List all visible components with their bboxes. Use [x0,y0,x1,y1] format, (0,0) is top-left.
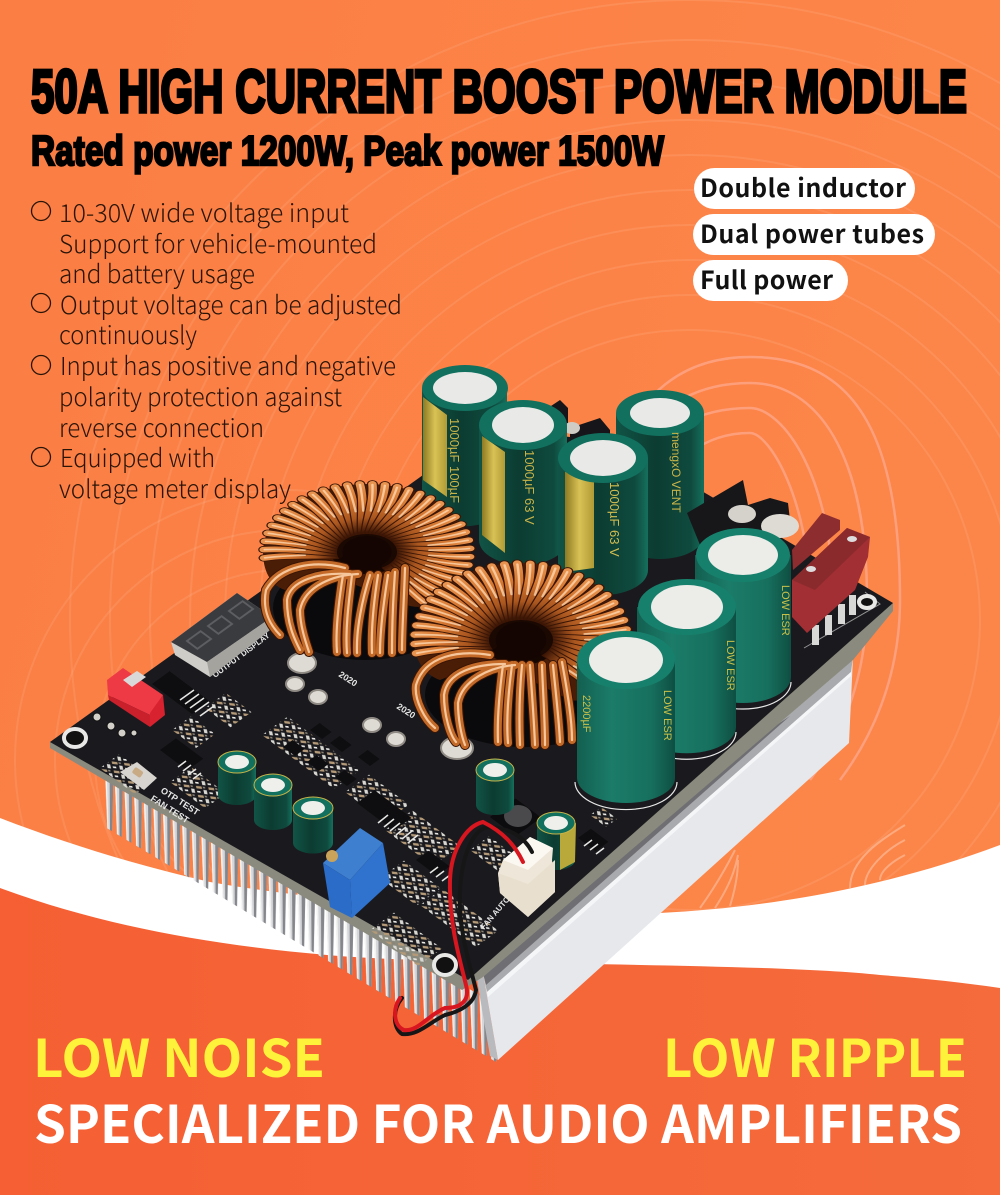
bottom red-orange wave [0,888,1000,1195]
terminal pins header [93,713,137,737]
subtitle: Rated power 1200W, Peak power 1500W [31,127,664,174]
front capacitor 6: LOW ESR [724,640,736,691]
bullet 1 [32,194,377,291]
front capacitor 5: LOW ESR [779,585,791,636]
bullet 4: Equipped with [60,439,215,475]
board markings: FAN AUTO [479,895,512,931]
chip legs [178,690,604,881]
low noise label: LOW NOISE [33,1017,325,1092]
bullet 2 [32,286,402,352]
pill: full power: Full power [700,261,833,297]
feature list [32,194,402,506]
front capacitor 5 [695,528,791,703]
mounting holes [64,596,875,975]
low ripple label: LOW RIPPLE [663,1017,967,1092]
pill: dual power tubes: Dual power tubes [700,215,924,251]
back capacitor 1 [422,365,508,526]
front capacitor 7 [577,631,675,803]
fuses [792,513,870,645]
pill: double inductor: Double inductor [700,169,906,205]
inductor 2 [414,563,628,747]
tact switch [120,762,157,790]
silver solder pads [286,653,473,759]
bullet 4 [32,439,291,506]
screw terminal block [687,480,799,560]
back capacitor 3 [558,433,648,595]
bullet 2: Output voltage can be adjusted [60,286,402,322]
bullet 3: reverse connection [59,409,264,445]
front capacitor 7: 2200µF [580,695,592,733]
rear terminal pieces [548,400,610,445]
board markings: OUTPUT DISPLAY [211,631,272,680]
bullet 3 [32,347,396,445]
board markings: OTP TEST [159,785,202,818]
bullet 4: voltage meter display [59,470,291,506]
front capacitor 7: LOW ESR [661,690,673,741]
bullet 3: polarity protection against [59,378,342,414]
product: boost power module [50,365,893,1066]
front capacitor 6 [637,579,736,753]
bullet 1: and battery usage [59,255,255,291]
bullet 2: continuously [59,316,197,352]
fan wires [395,822,532,1034]
bullet 1: Support for vehicle-mounted [59,225,377,261]
circuit board [50,432,893,990]
chips and mosfets [152,671,608,876]
voltage display [171,593,272,677]
back capacitor 2: 1000µF 63 V [522,450,537,525]
bullet 3: Input has positive and negative [60,347,396,383]
heatsink fins [105,770,498,1066]
white wave [0,818,1000,1010]
back capacitor 2 [479,400,567,565]
board markings: FAN TEST [149,793,191,825]
inductor 1 [263,484,471,660]
back capacitor 1: 1000µF 100µF [447,418,462,503]
board markings [149,631,512,931]
board markings: 2020 [337,669,359,688]
back capacitor 4: mengxO VENT [669,432,683,513]
bullet 1: 10-30V wide voltage input [59,194,349,230]
white fan connector [498,837,555,917]
small capacitors [218,751,576,870]
back capacitor 3: 1000µF 63 V [607,482,622,557]
heatsink side face [477,657,853,1060]
specialized for audio amplifiers: SPECIALIZED FOR AUDIO AMPLIFIERS [34,1083,962,1158]
board markings: 2020 [395,701,417,720]
smd component patches [100,693,617,966]
blue trimmer [323,828,390,918]
red dip switch [107,668,165,727]
back capacitor 4 [616,390,704,559]
small power inductor [490,798,541,836]
feature pills [693,168,935,301]
